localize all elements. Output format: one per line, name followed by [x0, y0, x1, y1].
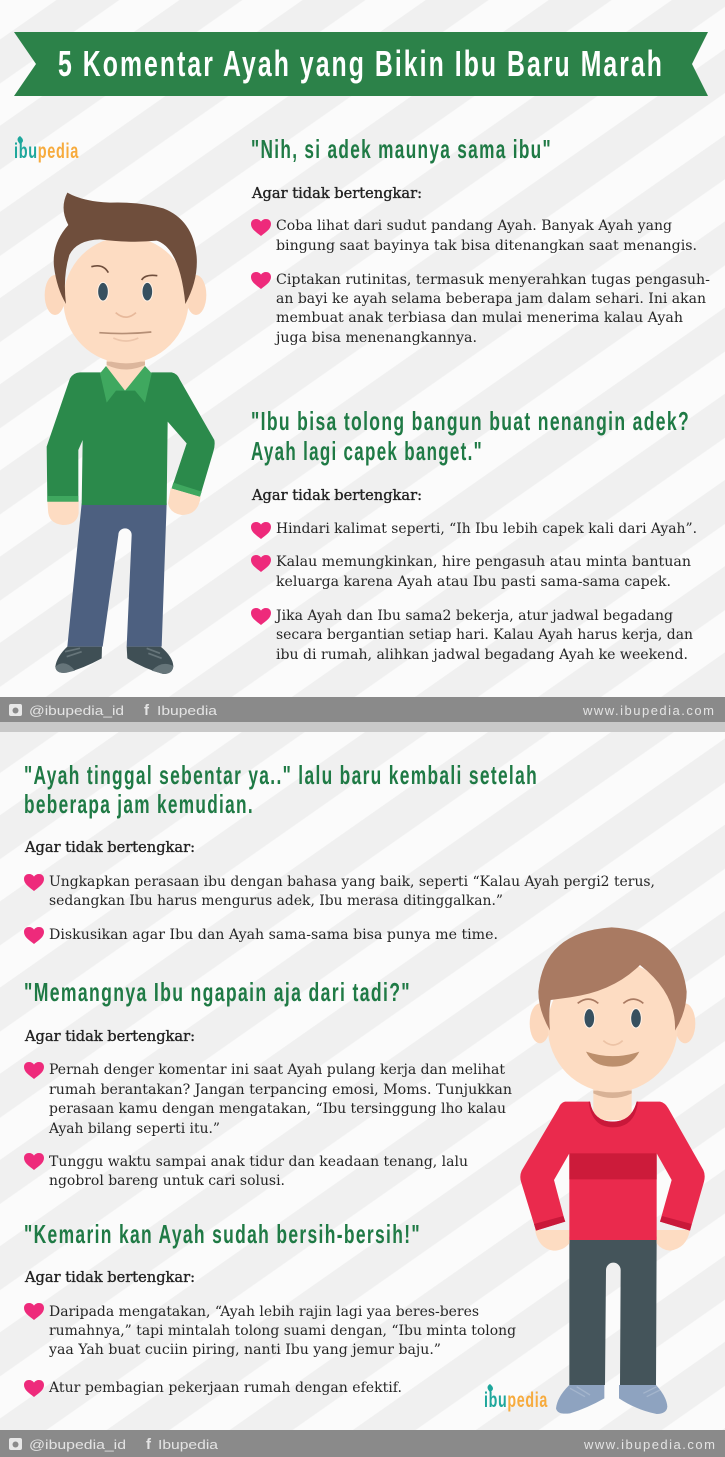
- logo: ibupedia bottom: ibupedia: [484, 1389, 548, 1412]
- text: tip 2: Kalau memungkinkan, hire pengasuh atau minta bantuan: [276, 554, 691, 570]
- footer bar: top: [0, 697, 725, 732]
- icon: heart: [24, 1380, 44, 1397]
- text: tip 2: [49, 1154, 468, 1189]
- icon: heart: [24, 1153, 44, 1170]
- heading: comment 5: "Kemarin kan Ayah sudah bersih-bersih!": [24, 1219, 421, 1249]
- text: tip 1: Ungkapkan perasaan ibu dengan bahasa yang baik, seperti “Kalau Ayah pergi2 terus,: [49, 874, 655, 890]
- footer bar: top: Ibupedia: [157, 703, 218, 718]
- text: tip 1: Hindari kalimat seperti, “Ih Ibu lebih capek kali dari Ayah”.: [276, 521, 697, 537]
- facebook: f: [144, 702, 150, 719]
- icon: heart: [24, 1303, 44, 1320]
- subheading: Agar tidak bertengkar:: [251, 488, 422, 504]
- footer bar: bottom: Ibupedia: [158, 1437, 219, 1452]
- text: tip 2: Tunggu waktu sampai anak tidur dan keadaan tenang, lalu: [49, 1154, 468, 1170]
- text: tip 2: membuat anak terbiasa dan mulai menerima kalau Ayah: [276, 310, 683, 326]
- panel: comment 1: [251, 134, 710, 346]
- logo: ibupedia bottom: [484, 1384, 548, 1412]
- title ribbon: [14, 32, 708, 96]
- website: www.ibupedia.com: [583, 1437, 715, 1452]
- text: tip 1: [276, 218, 697, 254]
- text: tip 1: Coba lihat dari sudut pandang Ayah. Banyak Ayah yang: [276, 218, 672, 234]
- website: www.ibupedia.com: [582, 703, 714, 718]
- text: tip 1: Ayah bilang seperti itu.”: [48, 1121, 220, 1137]
- panel: comment 3: [24, 760, 655, 944]
- text: tip 1: yaa Yah buat cuciin piring, nanti Ibu yang jemur baju.”: [48, 1342, 441, 1358]
- subheading: Agar tidak bertengkar:: [251, 186, 422, 202]
- icon: heart: [24, 1062, 44, 1079]
- text: tip 1: Daripada mengatakan, “Ayah lebih rajin lagi yaa beres-beres: [49, 1304, 479, 1320]
- text: tip 2: [274, 272, 710, 346]
- text: tip 3: [274, 608, 693, 663]
- text: tip 1: sedangkan Ibu harus mengurus adek, Ibu merasa ditinggalkan.”: [49, 893, 503, 909]
- text: tip 1: [48, 1062, 512, 1137]
- heading: comment 2: Ayah lagi capek banget.": [251, 436, 483, 466]
- text: tip 1: perasaan kamu dengan mengatakan, “Ibu tersinggung lho kalau: [49, 1101, 506, 1117]
- subheading: Agar tidak bertengkar:: [24, 1270, 195, 1286]
- text: tip 2: ngobrol bareng untuk cari solusi.: [49, 1173, 285, 1189]
- text: tip 1: [49, 874, 655, 909]
- subheading: Agar tidak bertengkar:: [24, 1029, 195, 1045]
- handle: @ibupedia_id: [29, 703, 124, 718]
- heading: comment 3: [24, 760, 538, 819]
- facebook: f: [146, 1436, 152, 1453]
- text: tip 2: Diskusikan agar Ibu dan Ayah sama-sama bisa punya me time.: [49, 927, 498, 943]
- heading: comment 4: "Memangnya Ibu ngapain aja dari tadi?": [24, 977, 411, 1007]
- heading: comment 3: beberapa jam kemudian.: [24, 789, 254, 819]
- logo: ibupedia top: [14, 136, 79, 163]
- footer bar: bottom: [0, 1430, 725, 1457]
- text: tip 2: an bayi ke ayah selama beberapa jam dalam sehari. Ini akan: [276, 291, 706, 307]
- icon: instagram: [9, 1438, 22, 1450]
- icon: heart: [251, 272, 271, 289]
- icon: heart: [251, 522, 271, 539]
- icon: heart: [24, 874, 44, 891]
- icon: heart: [24, 927, 44, 944]
- panel: comment 4: [24, 977, 512, 1189]
- character: mother in red sweater: [520, 927, 705, 1414]
- text: tip 2: Ciptakan rutinitas, termasuk menyerahkan tugas pengasuh-: [276, 272, 710, 288]
- panel: comment 2: [251, 406, 697, 663]
- icon: instagram: [9, 704, 22, 716]
- text: tip 2: [276, 554, 691, 590]
- subheading: Agar tidak bertengkar:: [24, 840, 195, 856]
- text: tip 3: ibu di rumah, alihkan jadwal begadang Ayah ke weekend.: [276, 647, 688, 663]
- text: tip 3: Jika Ayah dan Ibu sama2 bekerja, atur jadwal begadang: [274, 608, 673, 624]
- character: father in green sweater: [45, 193, 215, 674]
- text: tip 2: keluarga karena Ayah atau Ibu pasti sama-sama capek.: [276, 574, 671, 590]
- text: tip 2: juga bisa menenangkannya.: [274, 330, 477, 346]
- background: bottom section: [0, 732, 725, 1430]
- icon: heart: [251, 555, 271, 572]
- text: tip 2: Atur pembagian pekerjaan rumah dengan efektif.: [48, 1380, 402, 1396]
- panel: comment 5: [24, 1219, 516, 1397]
- logo: ibupedia top: ibupedia: [14, 140, 79, 163]
- text: tip 1: rumahnya,” tapi mintalah tolong suami dengan, “Ibu minta tolong: [49, 1323, 516, 1339]
- heading: comment 2: [251, 406, 690, 466]
- text: tip 1: rumah berantakan? Jangan terpancing emosi, Moms. Tunjukkan: [49, 1082, 512, 1098]
- text: tip 1: Pernah denger komentar ini saat Ayah pulang kerja dan melihat: [49, 1062, 505, 1078]
- heading: comment 1: "Nih, si adek maunya sama ibu": [251, 134, 552, 164]
- text: tip 1: [48, 1304, 516, 1358]
- text: tip 1: bingung saat bayinya tak bisa ditenangkan saat menangis.: [276, 238, 697, 254]
- text: tip 3: secara bergantian setiap hari. Kalau Ayah harus kerja, dan: [276, 627, 693, 643]
- icon: heart: [251, 219, 271, 236]
- background: top section: [0, 0, 725, 697]
- handle: @ibupedia_id: [29, 1437, 126, 1452]
- icon: heart: [251, 608, 271, 625]
